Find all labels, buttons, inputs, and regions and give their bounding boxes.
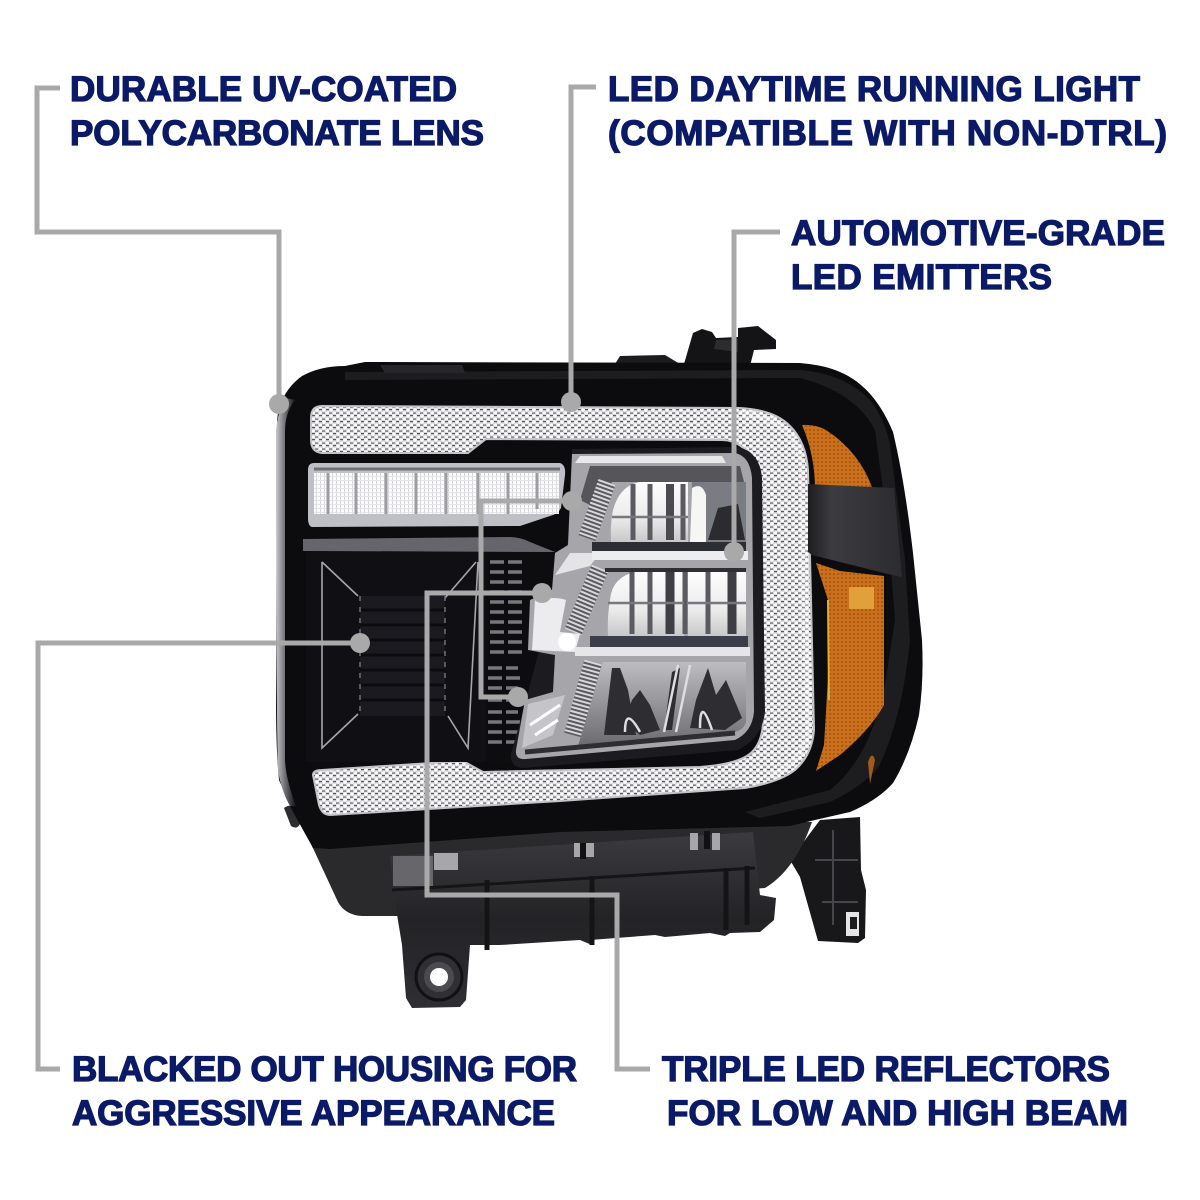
main housing body: [276, 362, 923, 849]
callout: triple LED reflectors: [427, 491, 1128, 1133]
dark chamber rim: [511, 447, 765, 768]
leader line: [37, 88, 279, 403]
callout: polycarbonate lens: [37, 70, 484, 414]
callout: blacked out housing: [38, 633, 577, 1133]
gray light block: [808, 484, 902, 577]
rear housing shell: [312, 820, 812, 916]
label text: AUTOMOTIVE-GRADE: [791, 214, 1165, 253]
screw hole tab: [416, 954, 462, 1000]
chrome shadow pieces: [580, 466, 744, 510]
callout: LED emitters: [724, 214, 1165, 562]
lower amber reflector: [816, 563, 884, 771]
marker dot: [561, 392, 581, 412]
label text: LED EMITTERS: [791, 258, 1052, 297]
middle reflector row: [605, 570, 746, 636]
leader line: [38, 643, 360, 1069]
upper amber reflector: [802, 425, 873, 490]
label text: FOR LOW AND HIGH BEAM: [667, 1094, 1128, 1133]
lower crossbar: [590, 636, 748, 647]
leader line: [734, 232, 780, 552]
right mounting bracket: [790, 817, 866, 943]
chamber lower edge: [525, 733, 735, 752]
blacked out housing panel: [306, 552, 488, 762]
label text: BLACKED OUT HOUSING FOR: [72, 1050, 577, 1089]
callout: daytime running light: [561, 70, 1167, 412]
label text: DURABLE UV-COATED: [70, 70, 457, 109]
glowing chrome area: [532, 553, 600, 652]
chrome fin ribs: [573, 482, 607, 735]
marker dot: [724, 542, 744, 562]
lower reflector row: [578, 662, 746, 746]
lower left chrome: [522, 695, 565, 748]
stepped ribs: [486, 552, 554, 762]
marker dot: [269, 394, 289, 414]
upper crossbar: [592, 542, 746, 551]
top chrome strip: [575, 456, 726, 463]
upper DRL module: [308, 463, 565, 527]
thin chrome strip: [303, 537, 555, 552]
leader line: [571, 87, 596, 401]
top lens sheen: [380, 365, 465, 373]
headlight assembly: [276, 326, 923, 1008]
amber reflection spot: [868, 755, 875, 784]
side alignment clip: [284, 806, 300, 828]
upper reflector row: [611, 482, 746, 542]
leader lines: [427, 501, 650, 1069]
label text: (COMPATIBLE WITH NON-DTRL): [608, 114, 1167, 153]
label text: AGGRESSIVE APPEARANCE: [72, 1094, 555, 1133]
top tabs and clip: [615, 326, 776, 366]
left chrome rim: [276, 398, 296, 806]
marker dot: [350, 633, 370, 653]
label text: POLYCARBONATE LENS: [70, 114, 484, 153]
triple LED reflector chamber: [511, 447, 765, 768]
chrome chamber base: [516, 453, 754, 759]
marker dots: [508, 491, 582, 707]
daylight running light C-shaped band: [311, 406, 814, 815]
top and right glossy rim: [345, 370, 910, 818]
label text: LED DAYTIME RUNNING LIGHT: [608, 70, 1140, 109]
label text: TRIPLE LED REFLECTORS: [662, 1050, 1110, 1089]
lower mounting bracket: [390, 831, 776, 1008]
